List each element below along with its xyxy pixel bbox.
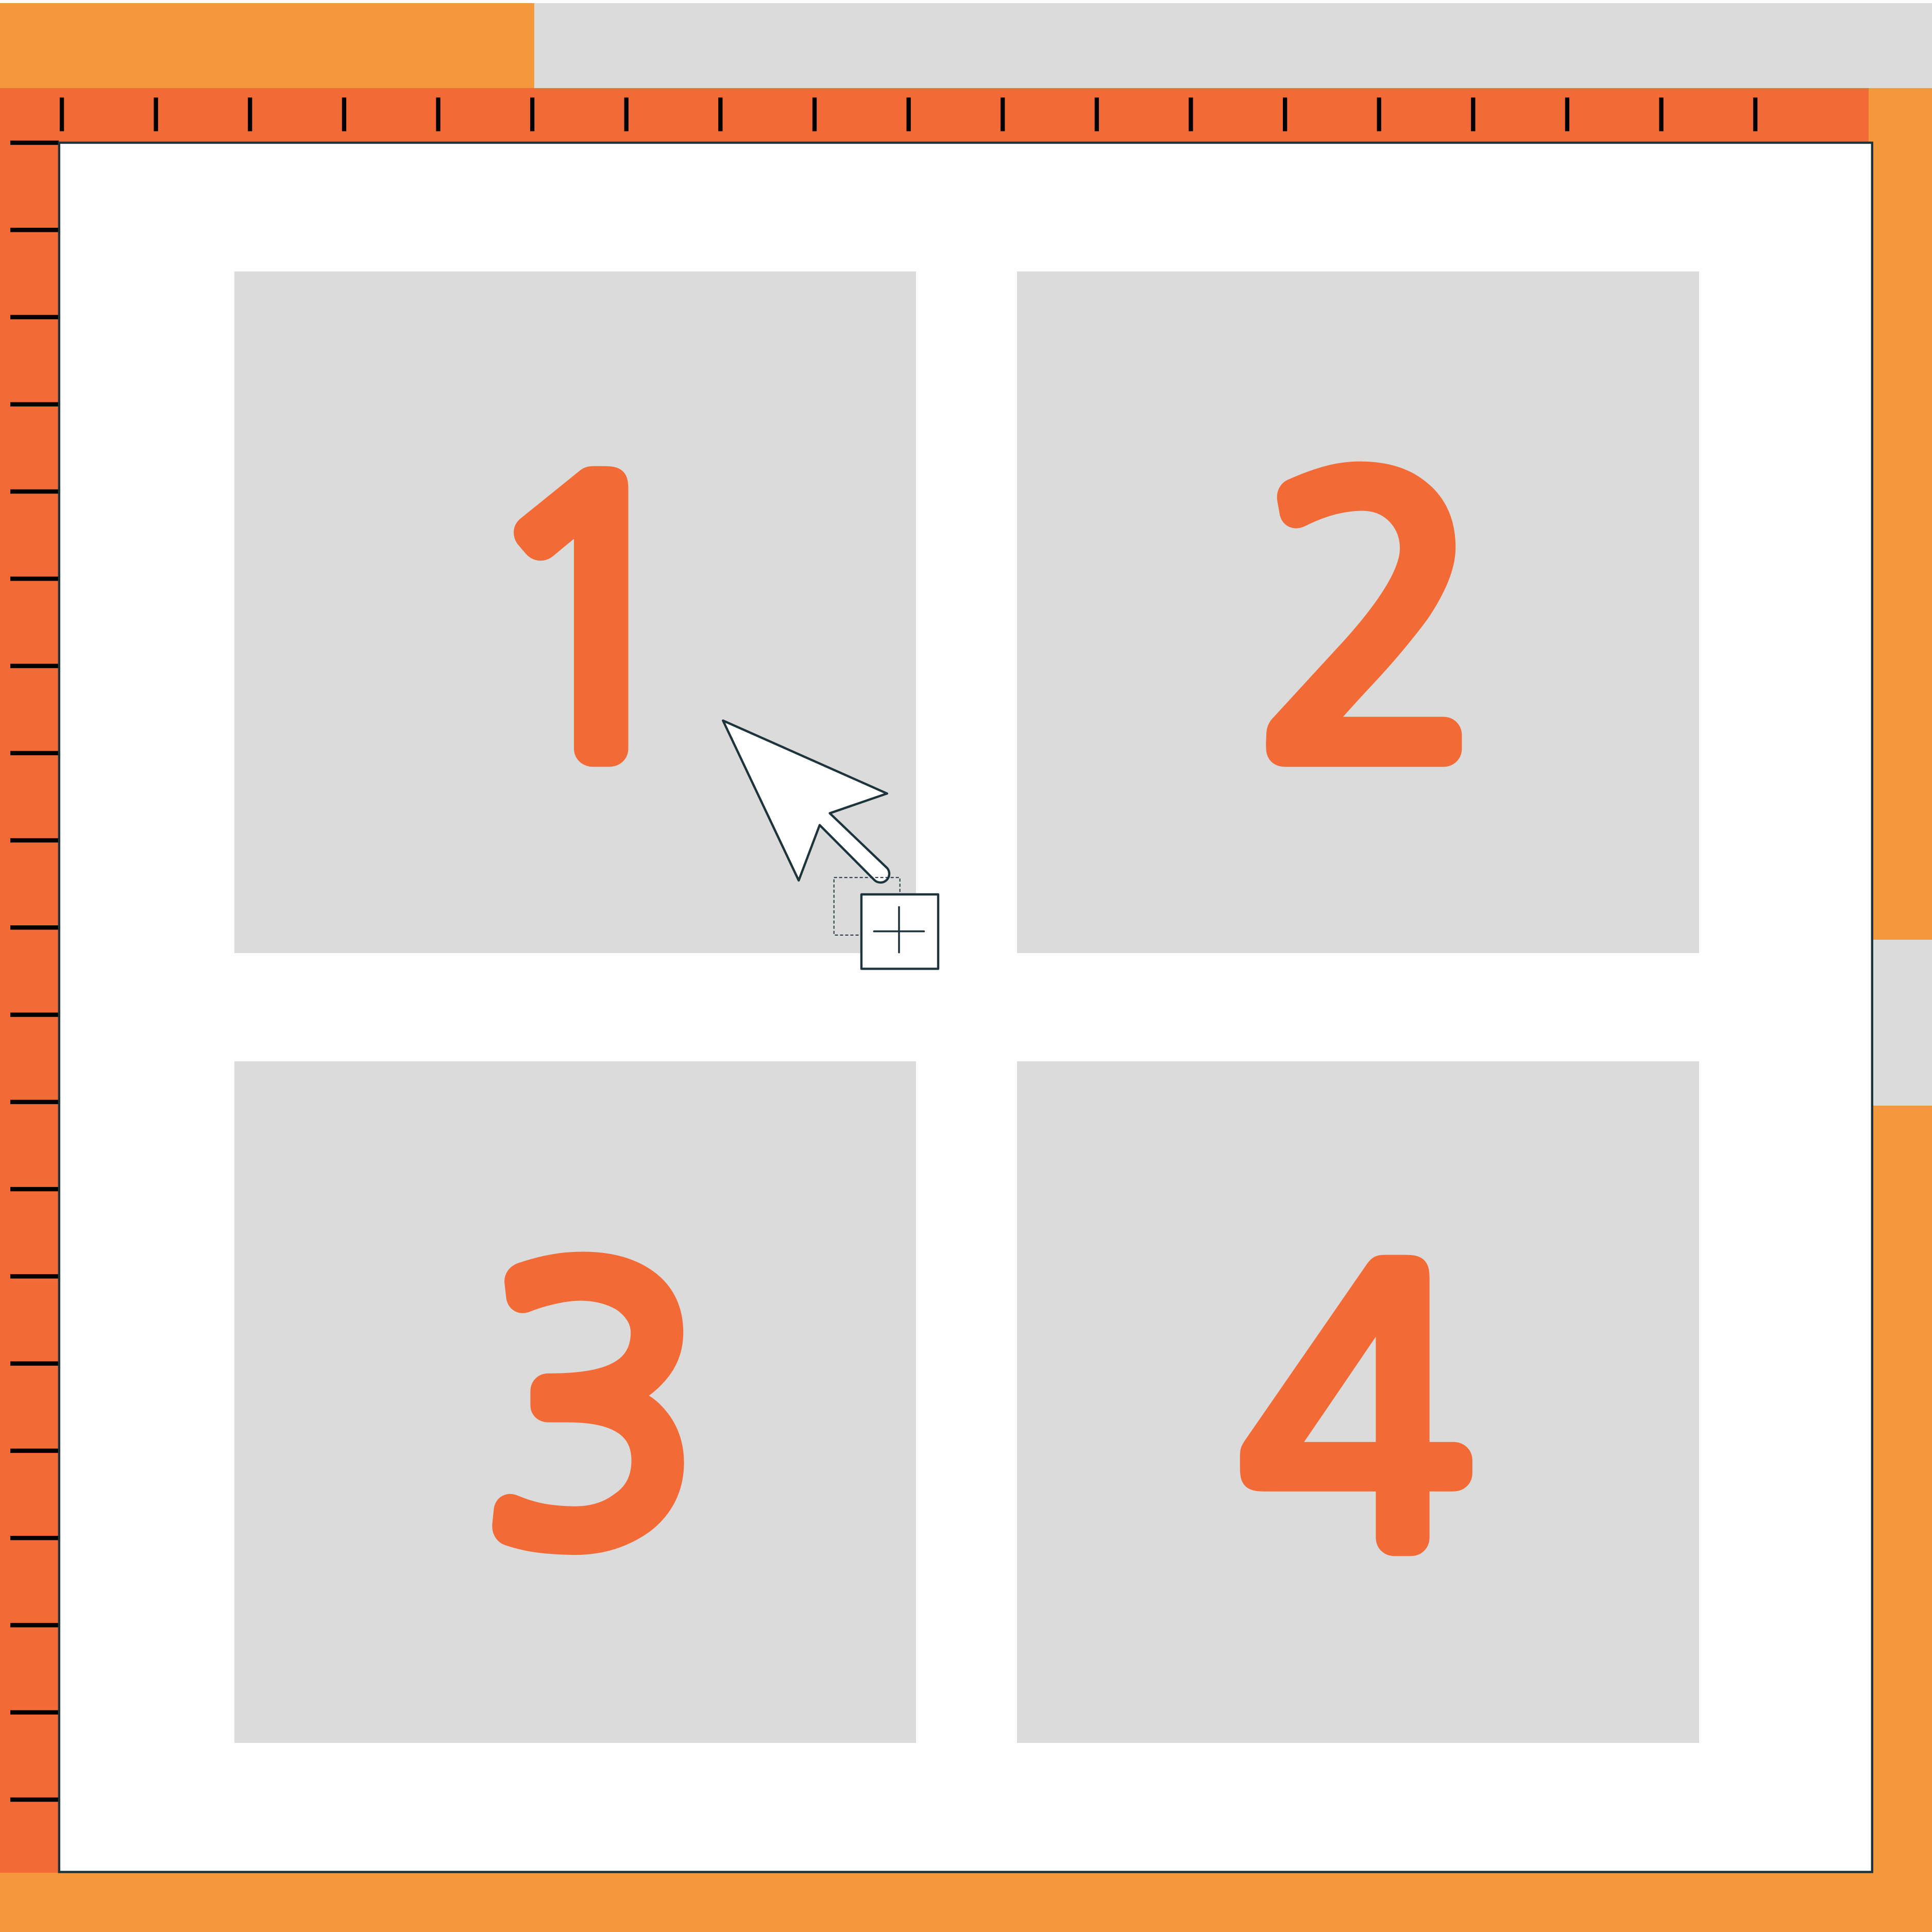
vertical ruler: [0, 88, 59, 1873]
panel 1: [234, 272, 916, 953]
top gray band: [534, 3, 1932, 88]
panel 2: [1017, 272, 1699, 953]
dashed selection: [834, 877, 900, 935]
number 4: 4: [1241, 1228, 1471, 1595]
top-left orange block: [0, 3, 534, 88]
right lower orange band: [1873, 1106, 1932, 1873]
arrow pointer: [723, 721, 889, 883]
bottom orange band: [0, 1873, 1932, 1932]
right gray block: [1873, 940, 1932, 1106]
icon: cursor with add-selection box: [723, 721, 938, 969]
horizontal ruler: [0, 88, 1869, 143]
number 2: 2: [1257, 436, 1483, 805]
number 1: 1: [473, 438, 705, 805]
number 3: 3: [482, 1227, 703, 1590]
panel 3: [234, 1061, 916, 1743]
panel 4: [1017, 1061, 1699, 1743]
plus box: [861, 894, 938, 969]
right orange band: [1869, 88, 1932, 940]
